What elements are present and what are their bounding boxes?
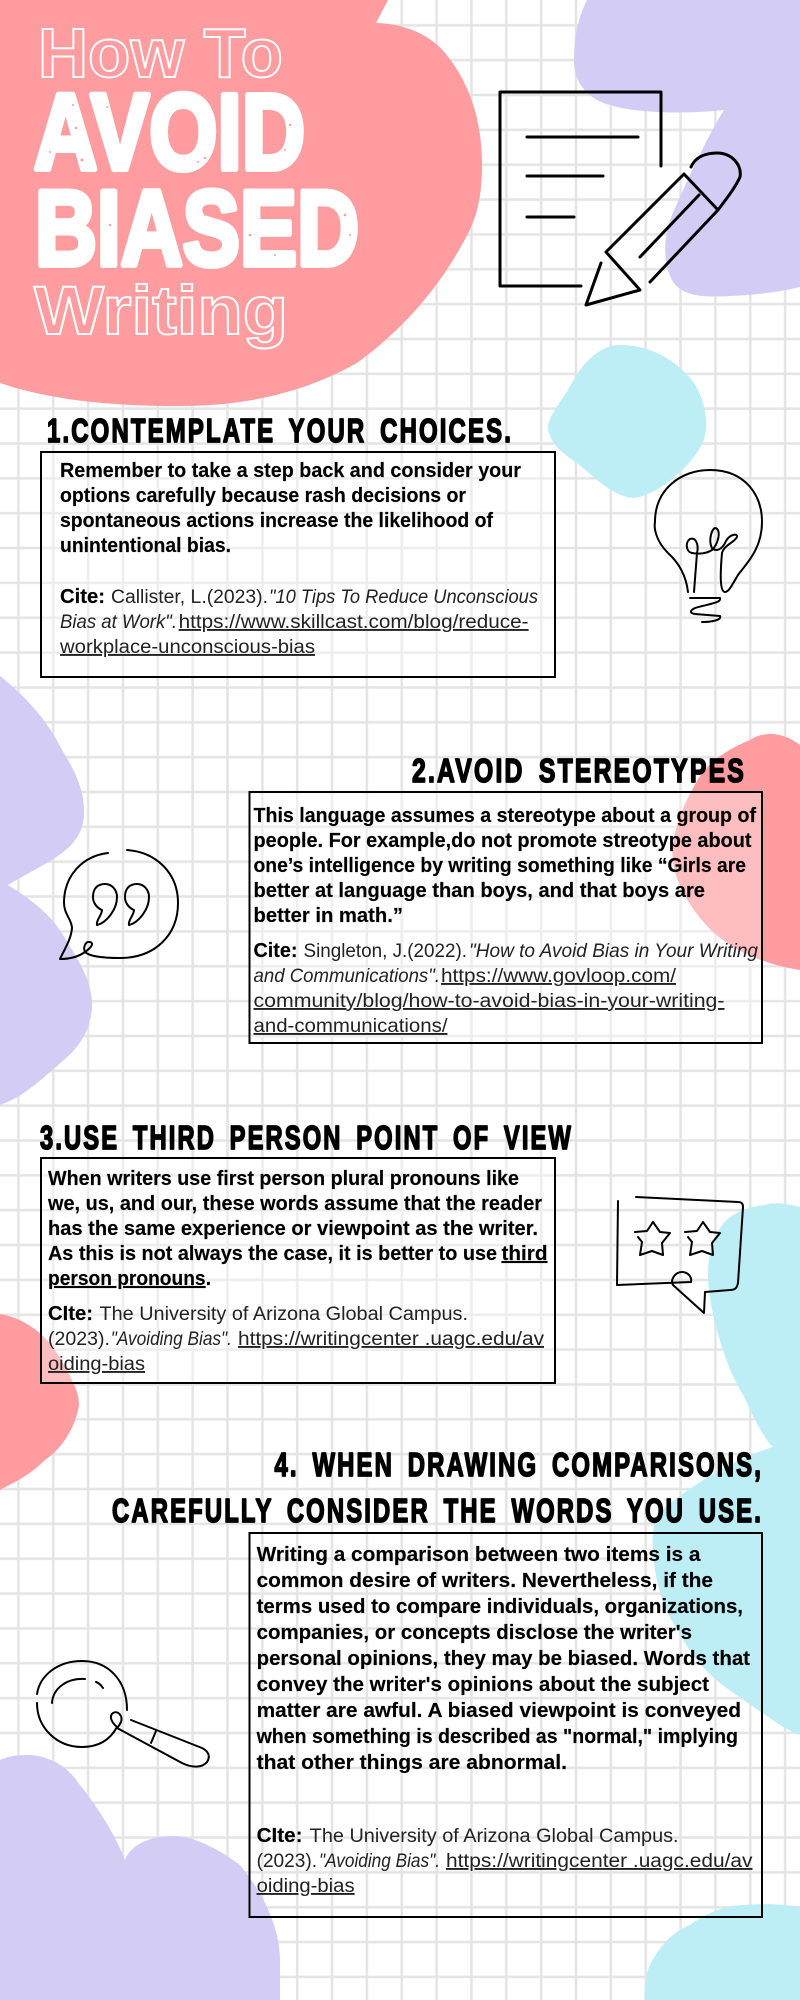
- body text 2: people. For example,do not promote streotype about: [254, 830, 752, 852]
- citation 3: [48, 1303, 545, 1375]
- blob: pink title backdrop: [0, 0, 482, 406]
- body text 2: one’s intelligence by writing something like “Girls are: [254, 855, 746, 877]
- blob: pink right: [672, 734, 800, 970]
- body text 1: spontaneous actions increase the likelihood of: [60, 510, 493, 532]
- blob: cyan upper: [548, 345, 706, 498]
- body text 4: when something is described as "normal," implying: [256, 1726, 738, 1748]
- panel: section 1: [41, 413, 555, 677]
- text box 4: [250, 1533, 762, 1917]
- body text 3: As this is not always the case, it is better to use: [48, 1243, 497, 1265]
- body text 2: better in math.”: [254, 905, 403, 927]
- citation 4: CIte:: [257, 1825, 302, 1847]
- blob: pink left: [0, 1314, 79, 1490]
- body text 3: [47, 1168, 548, 1290]
- citation 3: "Avoiding Bias".: [111, 1329, 232, 1350]
- body text 4: matter are awful. A biased viewpoint is conveyed: [257, 1700, 741, 1722]
- citation 2: Cite:: [254, 940, 298, 962]
- body text 3: .: [206, 1268, 211, 1290]
- citation 2: Singleton, J.(2022).: [304, 941, 467, 962]
- text box 2: [250, 792, 762, 1043]
- title line: How To: How To: [38, 14, 283, 92]
- heading: use third person point of view: 3.USE THIRD PERSON POINT OF VIEW: [40, 1120, 573, 1157]
- title line: Writing: Writing: [34, 272, 288, 349]
- body text 2: This language assumes a stereotype about a group of: [254, 805, 756, 827]
- blob: lavender bottom left: [0, 1755, 280, 2000]
- blob: cyan bottom right: [645, 1904, 800, 2000]
- body text 4: convey the writer's opinions about the subject: [257, 1674, 709, 1696]
- icon: light bulb: [655, 470, 762, 622]
- citation 3: oiding-bias: [48, 1354, 145, 1375]
- citation 4: [257, 1825, 753, 1897]
- body text 3: third: [502, 1243, 548, 1265]
- citation 2: https://www.govloop.com/: [441, 966, 677, 987]
- body text 1: unintentional bias.: [60, 535, 231, 557]
- body text 4: [256, 1544, 750, 1774]
- body text 4: terms used to compare individuals, organizations,: [257, 1596, 743, 1618]
- distressed texture specks: [49, 104, 351, 256]
- heading: when drawing comparisons: [112, 1447, 763, 1530]
- title: [34, 14, 359, 349]
- citation 2: [254, 940, 758, 1037]
- icon: magnifying glass: [37, 1661, 209, 1767]
- text box 3: [41, 1158, 555, 1383]
- body text 4: that other things are abnormal.: [257, 1752, 567, 1774]
- citation 2: and-communications/: [254, 1016, 448, 1037]
- citation 1: "10 Tips To Reduce Unconscious: [269, 587, 538, 608]
- body text 3: we, us, and our, these words assume that the reader: [47, 1193, 542, 1215]
- citation 3: The University of Arizona Global Campus.: [100, 1304, 468, 1325]
- body text 3: When writers use first person plural pronouns like: [48, 1168, 519, 1190]
- heading: contemplate your choices: 1.CONTEMPLATE YOUR CHOICES.: [47, 413, 513, 450]
- citation 1: https://www.skillcast.com/blog/reduce-: [179, 612, 529, 633]
- panel: section 3: [40, 1120, 573, 1383]
- icon: document and pencil: [500, 92, 740, 305]
- citation 4: The University of Arizona Global Campus.: [310, 1826, 679, 1847]
- citation 4: https://writingcenter .uagc.edu/av: [446, 1851, 753, 1872]
- citation 2: and Communications".: [254, 966, 440, 987]
- text box 1: [41, 452, 555, 677]
- citation 3: CIte:: [48, 1303, 93, 1325]
- panel: section 2: [250, 753, 762, 1043]
- citation 2: "How to Avoid Bias in Your Writing: [469, 941, 758, 962]
- body text 1: options carefully because rash decisions or: [60, 485, 466, 507]
- citation 3: (2023).: [48, 1329, 110, 1350]
- icon: rating bubble with two stars: [617, 1197, 743, 1313]
- blob: lavender top right: [574, 0, 800, 297]
- blob: cyan right: [653, 1203, 800, 1735]
- panel: section 4: [112, 1447, 763, 1917]
- body text 2: better at language than boys, and that boys are: [254, 880, 705, 902]
- body text 4: companies, or concepts disclose the writer's: [257, 1622, 692, 1644]
- body text 2: [254, 805, 756, 927]
- title line: BIASED: BIASED: [35, 168, 359, 288]
- citation 1: Cite:: [60, 586, 105, 608]
- body text 4: Writing a comparison between two items is a: [257, 1544, 701, 1566]
- citation 1: Bias at Work".: [60, 612, 177, 633]
- icon: quote speech bubble: [60, 850, 178, 959]
- citation 2: community/blog/how-to-avoid-bias-in-your-writing-: [254, 991, 724, 1012]
- body text 3: has the same experience or viewpoint as the writer.: [48, 1218, 538, 1240]
- citation 4: (2023).: [257, 1851, 317, 1872]
- body text 1: [60, 460, 521, 557]
- citation 1: workplace-unconscious-bias: [59, 637, 315, 658]
- blob: lavender left: [0, 676, 92, 1105]
- body text 3: person pronouns: [48, 1268, 206, 1290]
- title line: AVOID: AVOID: [34, 71, 305, 192]
- citation 1: [59, 586, 538, 658]
- citation 1: Callister, L.(2023).: [111, 587, 268, 608]
- citation 4: oiding-bias: [257, 1876, 355, 1897]
- citation 4: "Avoiding Bias".: [319, 1851, 440, 1872]
- body text 1: Remember to take a step back and consider your: [60, 460, 521, 482]
- citation 3: https://writingcenter .uagc.edu/av: [238, 1329, 545, 1350]
- body text 4: personal opinions, they may be biased. Words that: [257, 1648, 750, 1670]
- body text 4: common desire of writers. Nevertheless, if the: [257, 1570, 713, 1592]
